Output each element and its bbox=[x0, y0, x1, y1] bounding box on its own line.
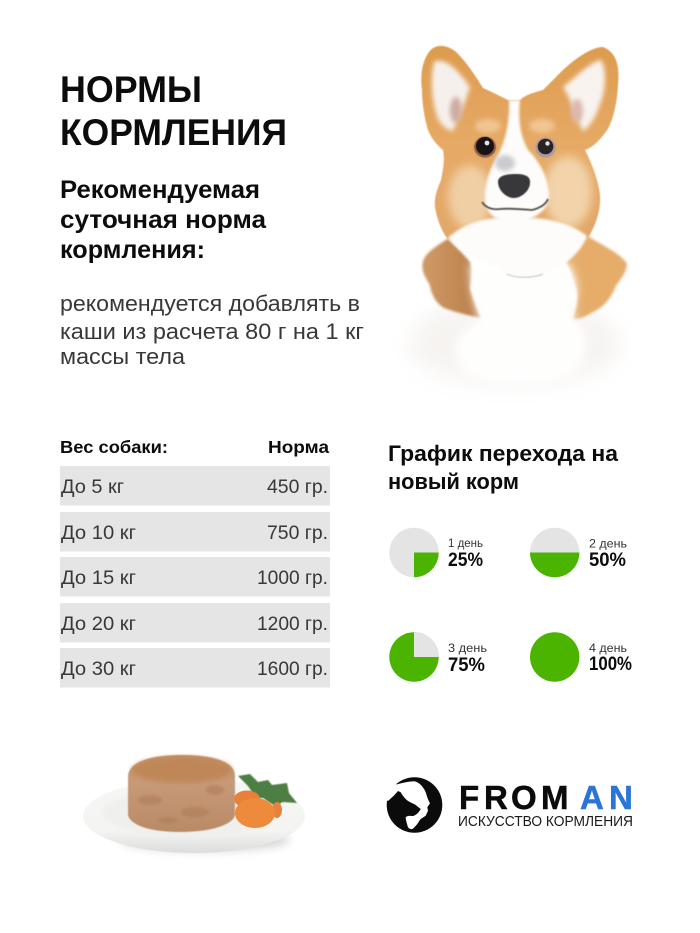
heading: transition schedule bbox=[388, 441, 619, 494]
pie chart: day 4, 100% bbox=[530, 632, 632, 682]
right eye bbox=[536, 138, 556, 158]
pie chart: day 3, 75%: 75% bbox=[448, 655, 485, 676]
patty bbox=[128, 755, 235, 832]
white ruff bbox=[448, 218, 587, 277]
row: up to 20 kg: До 20 кг bbox=[61, 614, 136, 635]
wordmark: FROM bbox=[459, 779, 568, 816]
title: НОРМЫ bbox=[60, 69, 202, 110]
pie chart: day 3, 75%: 3 день bbox=[448, 641, 487, 655]
patty top bbox=[132, 757, 232, 783]
row: up to 15 kg bbox=[60, 557, 330, 596]
row: up to 15 kg: До 15 кг bbox=[61, 568, 136, 589]
bottom fade bbox=[370, 355, 660, 412]
right ear inner bbox=[563, 60, 605, 131]
pie chart: day 1, 25% bbox=[389, 528, 483, 577]
title bbox=[60, 69, 287, 153]
pie chart: day 1, 25%: 1 день bbox=[448, 536, 483, 550]
subheading: recommended daily norm: Рекомендуемая bbox=[60, 176, 260, 204]
front carrot bbox=[235, 798, 275, 828]
logo mark bbox=[384, 776, 442, 833]
pie chart: day 3, 75% bbox=[389, 632, 487, 682]
logo: Froman: AN bbox=[580, 779, 633, 816]
plate bbox=[83, 779, 305, 853]
title: КОРМЛЕНИЯ bbox=[60, 112, 287, 153]
table: feeding norms bbox=[60, 437, 330, 688]
pie chart: day 2, 50%: 2 день bbox=[589, 536, 627, 550]
small carrot bbox=[272, 802, 282, 818]
left ear pink bbox=[450, 97, 462, 123]
plate shadow bbox=[120, 829, 290, 851]
body text bbox=[60, 291, 364, 369]
table header: Вес собаки: bbox=[60, 437, 168, 457]
pie chart: day 2, 50%: 50% bbox=[589, 550, 626, 571]
illustration: plate of food bbox=[83, 755, 305, 853]
pale face fur bbox=[448, 165, 492, 229]
blaze and muzzle bbox=[485, 100, 549, 222]
mouth bbox=[482, 199, 548, 210]
row: up to 20 kg bbox=[60, 603, 330, 642]
row: up to 5 kg: До 5 кг bbox=[61, 477, 124, 498]
row: up to 30 kg bbox=[60, 648, 330, 688]
row: up to 30 kg: До 30 кг bbox=[61, 659, 136, 680]
grey muzzle patch bbox=[495, 155, 515, 171]
left shoulder fur bbox=[422, 238, 481, 318]
row: up to 10 kg: 750 гр. bbox=[267, 523, 328, 544]
left eye bbox=[474, 136, 496, 158]
right shoulder fur bbox=[566, 235, 627, 320]
right ear pink bbox=[571, 99, 583, 123]
row: up to 30 kg: 1600 гр. bbox=[257, 659, 328, 680]
heading: transition schedule: График перехода на bbox=[388, 441, 619, 466]
subheading: recommended daily norm: кормления: bbox=[60, 236, 205, 264]
body text: рекомендуется добавлять в bbox=[60, 291, 360, 316]
subheading: recommended daily norm: суточная норма bbox=[60, 206, 267, 234]
logo: Froman bbox=[384, 776, 633, 833]
left ear inner bbox=[432, 61, 470, 131]
back carrot bbox=[234, 790, 260, 808]
pie chart: day 1, 25%: 25% bbox=[448, 550, 483, 571]
body text: каши из расчета 80 г на 1 кг bbox=[60, 319, 364, 344]
subheading: recommended daily norm bbox=[60, 176, 267, 264]
row: up to 5 kg bbox=[60, 466, 330, 506]
parsley bbox=[238, 774, 297, 806]
table header bbox=[60, 437, 329, 457]
row: up to 10 kg bbox=[60, 512, 330, 552]
table header: Норма bbox=[268, 437, 329, 457]
brow highlights bbox=[475, 119, 501, 133]
pie chart: day 2, 50% bbox=[530, 528, 627, 577]
tagline: ИСКУССТВО КОРМЛЕНИЯ bbox=[458, 814, 633, 830]
pie chart: day 4, 100%: 100% bbox=[589, 654, 632, 675]
row: up to 10 kg: До 10 кг bbox=[61, 523, 136, 544]
nose bbox=[498, 174, 530, 198]
white chest bbox=[456, 262, 586, 384]
faded lower body bbox=[410, 295, 620, 395]
body text: массы тела bbox=[60, 344, 186, 369]
heading: transition schedule: новый корм bbox=[388, 469, 519, 494]
pie chart: day 4, 100%: 4 день bbox=[589, 641, 627, 655]
plate inner shading bbox=[102, 789, 278, 837]
row: up to 20 kg: 1200 гр. bbox=[257, 614, 328, 635]
patty texture bbox=[138, 785, 224, 823]
head and ears silhouette bbox=[421, 46, 618, 241]
row: up to 15 kg: 1000 гр. bbox=[257, 568, 328, 589]
ruff shadow bbox=[507, 274, 543, 277]
row: up to 5 kg: 450 гр. bbox=[267, 477, 328, 498]
illustration: corgi dog bbox=[370, 46, 660, 412]
